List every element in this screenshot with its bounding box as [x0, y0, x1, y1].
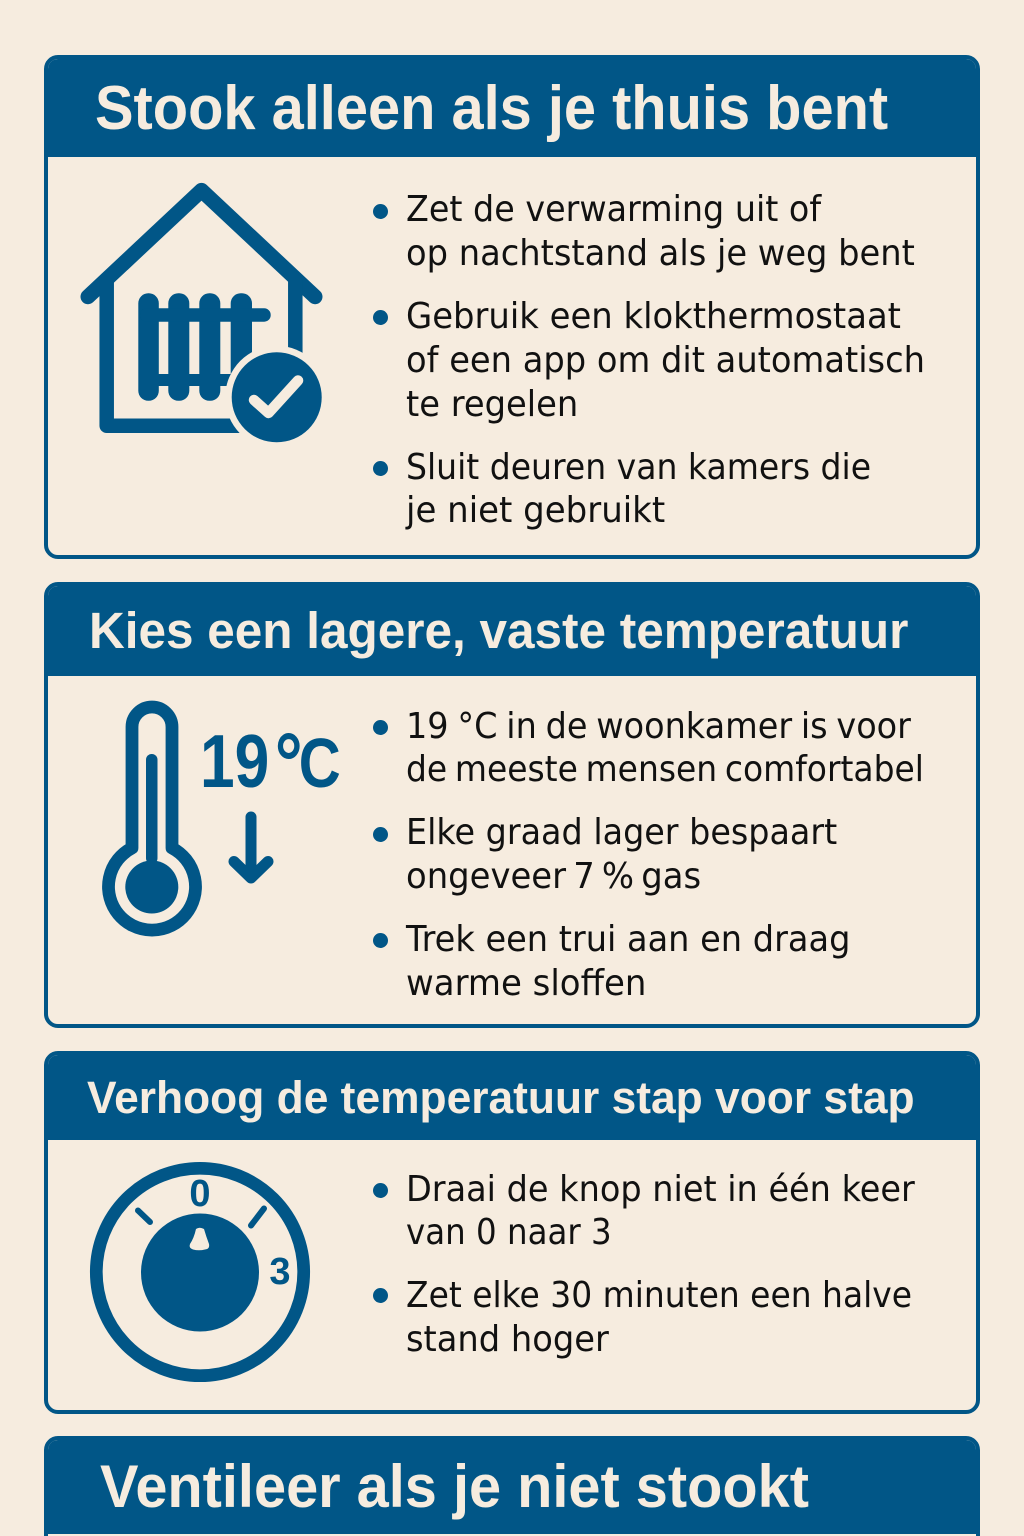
- heading: verhoog: Verhoog de temperatuur stap voor stap: [87, 1072, 915, 1123]
- bullet list: panel 2: warme sloffen: [406, 963, 646, 1004]
- icon: thermostat dial: 0: [189, 1173, 211, 1215]
- bullet list: panel 1: of een app om dit automatisch: [406, 340, 925, 381]
- panel: verhoog de temperatuur stap voor stap: [44, 1051, 980, 1414]
- panel: stook alleen als je thuis bent: [44, 55, 980, 559]
- heading: kies een lagere: [44, 582, 980, 676]
- heading: stook alleen: Stook alleen als je thuis bent: [95, 74, 888, 142]
- bullet list: panel 1: op nachtstand als je weg bent: [406, 233, 915, 274]
- bullet list: panel 1: Sluit deuren van kamers die: [406, 447, 871, 488]
- heading: verhoog: [44, 1051, 980, 1140]
- bullet list: panel 2: [373, 706, 924, 1004]
- icon: thermometer with 19 °C and down arrow: °: [275, 717, 303, 810]
- icon: house with radiator and check: [80, 182, 322, 442]
- bullet list: panel 3: stand hoger: [406, 1319, 609, 1360]
- heading: ventileer: [44, 1436, 980, 1534]
- bullet list: panel 2: Trek een trui aan en draag: [406, 919, 850, 960]
- bullet list: panel 3: van 0 naar 3: [406, 1212, 612, 1253]
- bullet list: panel 1: Gebruik een klokthermostaat: [406, 296, 901, 337]
- bullet list: panel 1: te regelen: [406, 384, 578, 425]
- bullet list: panel 1: [373, 189, 925, 531]
- bullet list: panel 1: je niet gebruikt: [406, 490, 665, 531]
- bullet list: panel 1: Zet de verwarming uit of: [406, 189, 821, 230]
- bullet list: panel 3: Zet elke 30 minuten een halve: [406, 1275, 912, 1316]
- heading: stook alleen: [44, 55, 980, 157]
- heading: kies een lagere: Kies een lagere, vaste temperatuur: [89, 602, 908, 659]
- bullet list: panel 2: Elke graad lager bespaart: [406, 812, 837, 853]
- bullet list: panel 3: Draai de knop niet in één keer: [406, 1169, 915, 1210]
- panel: ventileer als je niet stookt: [44, 1436, 980, 1536]
- icon: thermostat dial: 3: [269, 1251, 291, 1293]
- icon: thermometer with 19 °C and down arrow: C: [299, 724, 341, 802]
- panel: kies een lagere, vaste temperatuur: [44, 582, 980, 1028]
- heading: ventileer: Ventileer als je niet stookt: [100, 1453, 809, 1520]
- bullet list: panel 2: 19 °C in de woonkamer is voor: [406, 706, 911, 747]
- bullet list: panel 2: ongeveer 7 % gas: [406, 856, 701, 897]
- bullet list: panel 2: de meeste mensen comfortabel: [406, 749, 924, 790]
- icon: thermometer with 19 °C and down arrow: 19: [200, 720, 269, 803]
- icon: thermometer with 19 °C and down arrow: [102, 700, 341, 936]
